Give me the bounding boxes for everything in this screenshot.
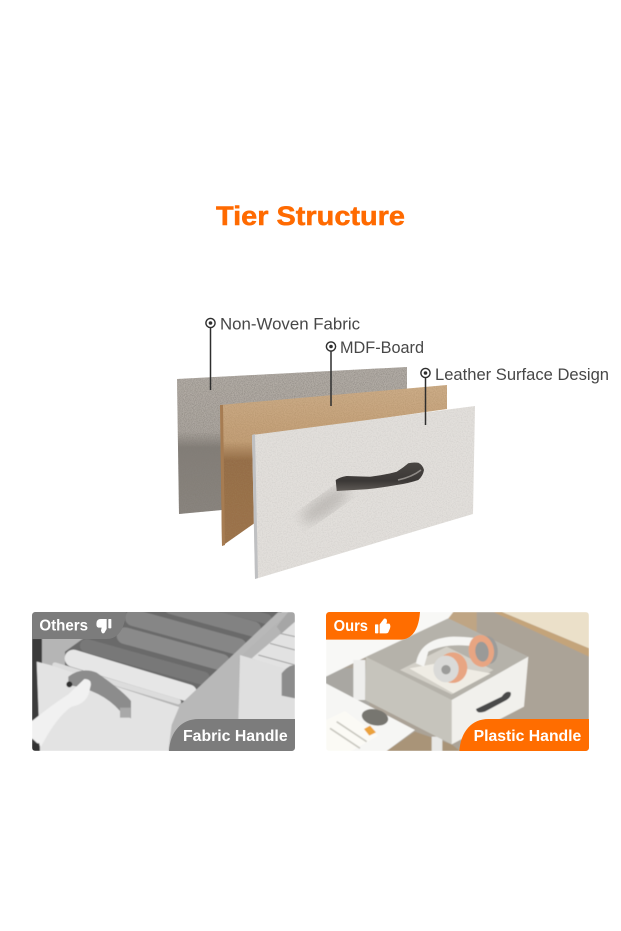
layer: leather surface with handle bbox=[252, 406, 475, 579]
title: Tier Structure bbox=[216, 201, 405, 231]
layer: non-woven fabric bbox=[177, 367, 407, 514]
icon: thumbs up bbox=[375, 618, 390, 633]
photo: white drawer with headphones bbox=[326, 612, 589, 751]
label: others: Others bbox=[39, 618, 88, 635]
label: fabric handle: Fabric Handle bbox=[183, 728, 288, 745]
photo: grey fabric box bbox=[32, 607, 295, 751]
callout: Non-Woven Fabric: Non-Woven Fabric bbox=[220, 314, 360, 334]
panel: ours - plastic handle bbox=[326, 612, 589, 751]
label: ours bbox=[326, 612, 420, 640]
label: others bbox=[32, 612, 126, 639]
callout: MDF-Board bbox=[326, 338, 424, 406]
callout: MDF-Board: MDF-Board bbox=[340, 338, 424, 357]
icon: thumbs down bbox=[96, 619, 111, 633]
label: plastic handle bbox=[459, 719, 589, 751]
layer: MDF board bbox=[220, 385, 447, 546]
diagram: exploded tier layers bbox=[177, 367, 475, 579]
callout: Leather Surface Design bbox=[421, 365, 609, 425]
icon: drawer handle bbox=[336, 462, 424, 491]
callout: Leather Surface Design: Leather Surface Design bbox=[435, 365, 609, 384]
callout: Non-Woven Fabric bbox=[206, 314, 360, 390]
label: plastic handle: Plastic Handle bbox=[474, 728, 582, 745]
label: fabric handle bbox=[169, 719, 295, 751]
label: ours: Ours bbox=[334, 618, 368, 635]
panel: others - fabric handle bbox=[32, 607, 295, 751]
